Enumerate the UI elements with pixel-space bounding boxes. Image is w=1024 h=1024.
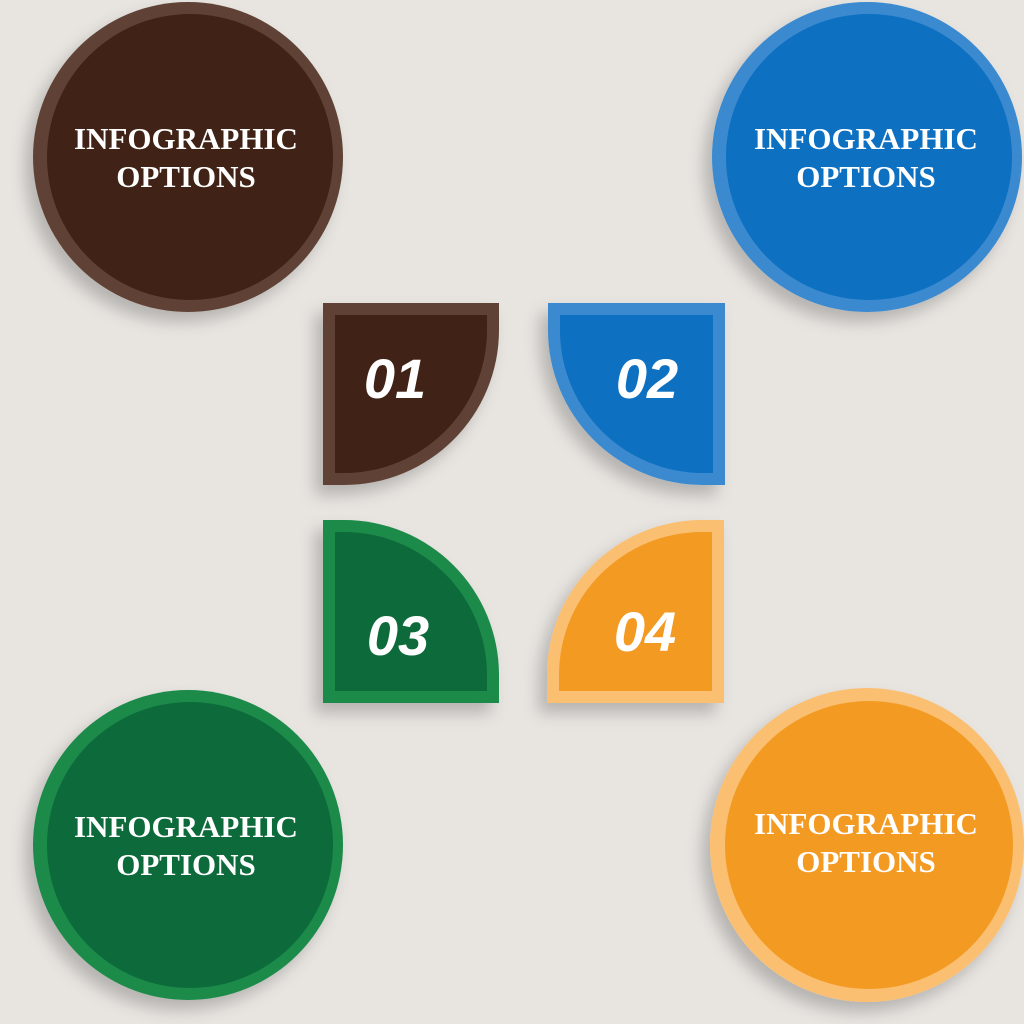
quarter: 01 xyxy=(323,303,499,485)
circle: brown option: OPTIONS xyxy=(116,159,256,194)
quarter: 02: 02 xyxy=(616,347,678,410)
circle: orange option xyxy=(710,688,1024,1002)
circle: green option xyxy=(33,690,343,1000)
circle: green option: INFOGRAPHIC xyxy=(74,809,298,844)
quarter: 04 xyxy=(547,520,724,703)
circle: blue option xyxy=(712,2,1022,312)
quarter: 02 xyxy=(548,303,725,485)
quarter: 03 xyxy=(323,520,499,703)
circle: blue option: OPTIONS xyxy=(796,159,936,194)
quarter: 04: 04 xyxy=(614,600,676,663)
circle: brown option: INFOGRAPHIC xyxy=(74,121,298,156)
circle: blue option: INFOGRAPHIC xyxy=(754,121,978,156)
circle: brown option xyxy=(33,2,343,312)
circle: orange option: OPTIONS xyxy=(796,844,936,879)
quarter: 03: 03 xyxy=(367,604,429,667)
circle: green option: OPTIONS xyxy=(116,847,256,882)
quarter: 01: 01 xyxy=(364,347,426,410)
circle: orange option: INFOGRAPHIC xyxy=(754,806,978,841)
